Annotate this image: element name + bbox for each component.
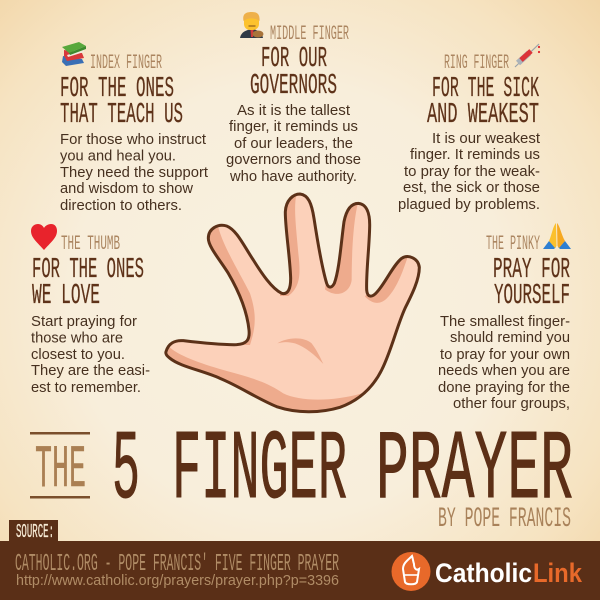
heading: for the ones that teach us bbox=[60, 72, 183, 131]
text block: pinky: The smallest finger- bbox=[440, 313, 570, 330]
panel: pinky bbox=[438, 223, 571, 412]
text block: pinky: should remind you bbox=[450, 329, 570, 346]
heading: for the sick and weakest bbox=[427, 72, 539, 131]
text block: middle finger: finger, it reminds us bbox=[229, 118, 358, 135]
text block: middle finger: As it is the tallest bbox=[237, 102, 351, 119]
icon: praying hands bbox=[543, 223, 571, 249]
text block: pinky: needs when you are bbox=[438, 362, 570, 379]
text block: middle finger bbox=[226, 102, 361, 185]
text block: index finger: For those who instruct bbox=[60, 131, 207, 148]
logo: catholic link: Catholic bbox=[435, 558, 532, 588]
text block: index finger: and wisdom to show bbox=[60, 180, 193, 197]
text block: index finger bbox=[60, 131, 209, 214]
text block: ring finger: to pray for the weak- bbox=[404, 163, 540, 180]
text block: pinky: done praying for the bbox=[438, 379, 570, 396]
text block: thumb: those who are bbox=[31, 330, 123, 346]
text block: thumb: est to remember. bbox=[31, 379, 141, 396]
text block: ring finger: est, the sick or those bbox=[403, 179, 540, 196]
heading: for the ones we love: FOR THE ONES bbox=[32, 253, 144, 286]
panel: index finger: INDEX FINGER bbox=[90, 52, 162, 75]
panel: index finger bbox=[60, 42, 209, 214]
heading: for our governors bbox=[250, 42, 337, 102]
text block: pinky: to pray for your own bbox=[440, 346, 570, 363]
text block: pinky bbox=[438, 313, 570, 412]
text block: ring finger bbox=[398, 130, 541, 213]
source citation: http://www.catholic.org/prayers/prayer.php?p=3396 bbox=[16, 572, 339, 589]
logo: catholic link bbox=[392, 552, 583, 591]
panel: ring finger: RING FINGER bbox=[444, 52, 509, 75]
logo: catholic link: Link bbox=[533, 558, 583, 588]
label: middle finger: MIDDLE FINGER bbox=[270, 23, 349, 46]
text block: thumb: They are the easi- bbox=[31, 362, 150, 379]
label: the thumb: THE THUMB bbox=[61, 233, 120, 256]
text block: thumb: Start praying for bbox=[31, 313, 137, 330]
text block: ring finger: plagued by problems. bbox=[398, 196, 540, 213]
title: the 5 finger prayer: THE bbox=[35, 437, 86, 505]
icon: governor bbox=[240, 12, 264, 38]
source tab: SOURCE: bbox=[16, 521, 54, 543]
text block: thumb bbox=[31, 313, 150, 396]
text block: thumb: closest to you. bbox=[31, 346, 125, 363]
text block: ring finger: finger. It reminds us bbox=[410, 146, 540, 163]
source tab bbox=[9, 520, 58, 543]
illustration: hand bbox=[160, 193, 419, 420]
text block: middle finger: governors and those bbox=[226, 151, 361, 168]
title: the 5 finger prayer: FINGER bbox=[172, 416, 347, 527]
icon: syringe bbox=[515, 44, 540, 67]
icon: books bbox=[62, 42, 86, 66]
source citation bbox=[15, 551, 339, 589]
text block: index finger: They need the support bbox=[60, 164, 209, 181]
text block: index finger: direction to others. bbox=[60, 197, 182, 214]
icon: heart bbox=[31, 224, 57, 250]
heading: for our governors: GOVERNORS bbox=[250, 69, 337, 102]
heading: for the ones that teach us: FOR THE ONES bbox=[60, 72, 174, 105]
panel: ring finger bbox=[398, 44, 541, 213]
panel: middle finger bbox=[226, 12, 361, 185]
heading: for our governors: FOR OUR bbox=[261, 42, 327, 75]
text block: index finger: you and heal you. bbox=[60, 148, 176, 164]
heading: for the ones that teach us: THAT TEACH US bbox=[60, 98, 183, 131]
panel: pinky: THE PINKY bbox=[486, 233, 540, 256]
footer band bbox=[0, 520, 600, 600]
heading: for the ones we love: WE LOVE bbox=[32, 279, 100, 312]
panel: thumb bbox=[31, 224, 150, 396]
title: the 5 finger prayer bbox=[30, 416, 573, 527]
heading: pray for yourself bbox=[493, 253, 570, 312]
text block: middle finger: who have authority. bbox=[229, 168, 357, 185]
text block: ring finger: It is our weakest bbox=[432, 130, 541, 147]
text block: middle finger: of our leaders, the bbox=[234, 135, 353, 152]
text block: pinky: other four groups, bbox=[453, 395, 570, 412]
title: the 5 finger prayer: 5 bbox=[112, 416, 140, 527]
heading: for the ones we love bbox=[32, 253, 144, 312]
